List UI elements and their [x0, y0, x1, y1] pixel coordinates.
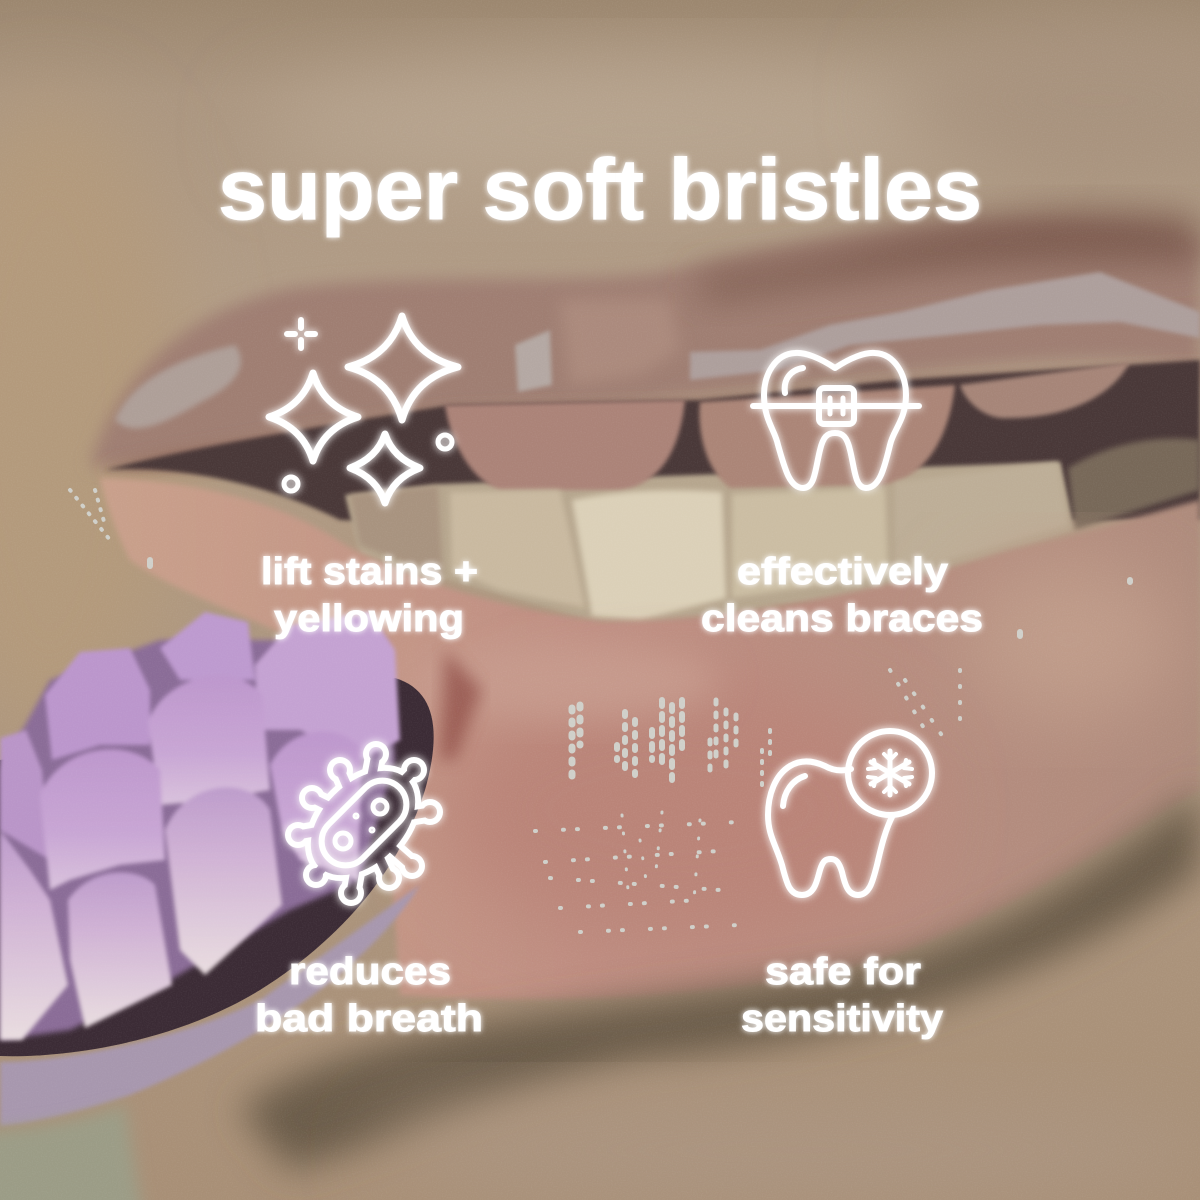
panel: safe for sensitivity [741, 731, 943, 1040]
icon: tooth with snowflake [768, 731, 932, 895]
text: effectively cleans braces [701, 551, 983, 640]
text: reduces bad breath: bad breath [255, 998, 483, 1040]
background photo: lip gloss glitter [70, 490, 1130, 932]
background photo: upper lip [90, 212, 1200, 470]
text: reduces bad breath: reduces [289, 951, 451, 993]
text: safe for sensitivity: sensitivity [741, 998, 943, 1040]
background photo: lower lip [100, 478, 1200, 1200]
bristle tufts [0, 612, 400, 1040]
panel: lift stains [261, 316, 478, 640]
panel: reduces bad breath [255, 741, 483, 1040]
icon: sparkles [269, 316, 458, 503]
text: lift stains + yellowing: yellowing [274, 598, 464, 640]
text: lift stains + yellowing [261, 551, 478, 640]
title: super soft bristles [218, 142, 982, 238]
text: effectively cleans braces: effectively [737, 551, 948, 593]
text: lift stains + yellowing: lift stains + [261, 551, 478, 593]
icon: tooth with braces [753, 353, 919, 488]
text: effectively cleans braces: cleans braces [701, 598, 983, 640]
text: safe for sensitivity: safe for [765, 951, 921, 993]
text: reduces bad breath [255, 951, 483, 1040]
background photo: mouth interior [105, 360, 1200, 625]
background photo: toothbrush [0, 612, 434, 1200]
text: safe for sensitivity [741, 951, 943, 1040]
panel: effectively cleans braces [701, 353, 983, 640]
icon: bacteria [282, 741, 444, 906]
